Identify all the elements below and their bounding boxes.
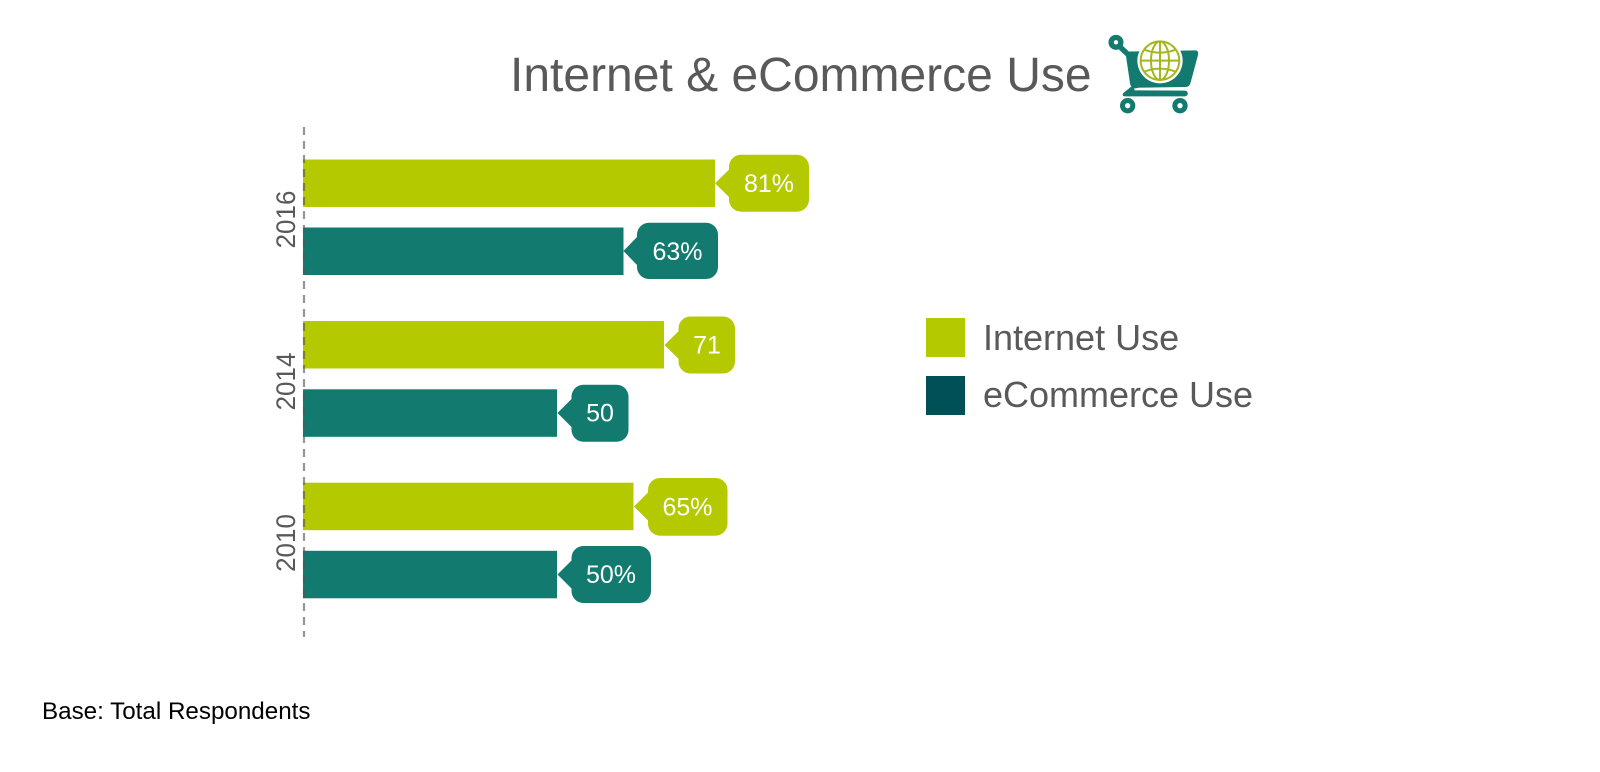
callout 50 (2014): 50 [586,400,614,428]
callout 63% [624,223,718,279]
callout 81%: 81% [744,170,794,198]
year label 2014: 2014 [271,353,301,410]
year label 2010: 2010 [271,514,301,572]
bar: 2014 Internet Use [303,321,664,368]
legend label: eCommerce Use: eCommerce Use [983,374,1253,415]
bar: 2010 Internet Use [303,483,634,530]
callout 81% [715,155,809,212]
callout 65% [634,478,728,536]
callout 50%: 50% [586,561,636,589]
bar: 2010 eCommerce Use [303,551,557,598]
legend [926,317,1253,415]
year label 2016: 2016 [271,191,301,248]
title: Internet & eCommerce Use [510,49,1092,102]
legend swatch: eCommerce Use [926,376,965,415]
bar: 2016 eCommerce Use [303,228,624,275]
icon: shopping cart with globe [1111,37,1198,111]
bar: 2014 eCommerce Use [303,389,557,437]
callout 50% [558,546,651,603]
bar: 2016 Internet Use [303,160,715,207]
callout 63%: 63% [652,238,703,266]
base note: Base: Total Respondents [42,698,310,725]
axis line [303,127,305,637]
callout 65%: 65% [662,494,713,522]
callout 71 [664,316,735,374]
legend swatch: Internet Use [926,318,965,357]
legend label: Internet Use: Internet Use [983,317,1179,358]
callout 71: 71 [693,332,721,360]
callout 50 (2014) [558,385,628,442]
bar chart [271,127,809,637]
